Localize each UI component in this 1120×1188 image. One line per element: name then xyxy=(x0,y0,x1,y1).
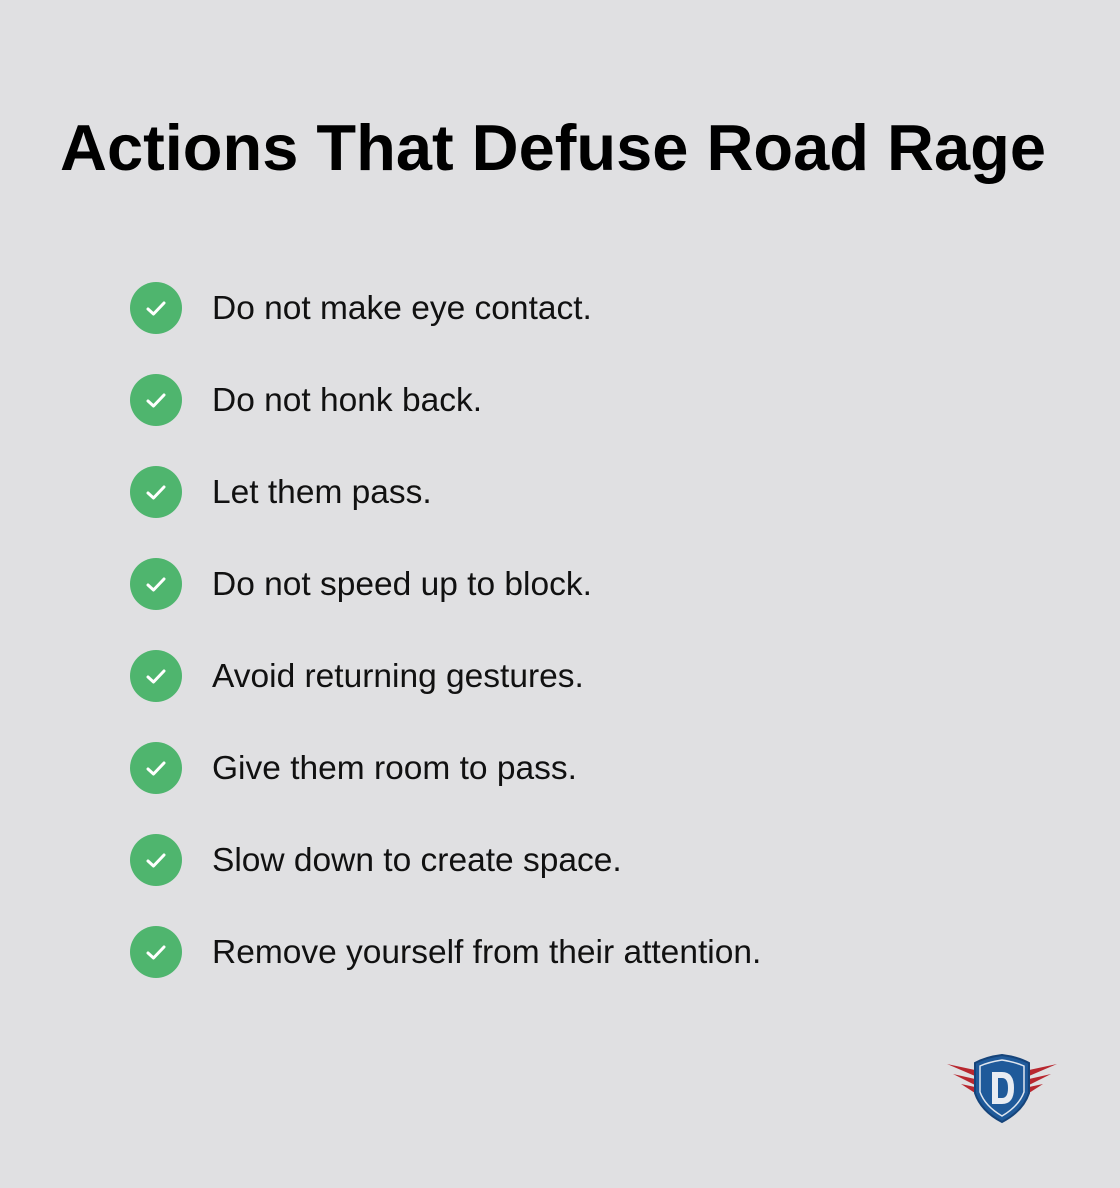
item 8: Remove yourself from their attention. xyxy=(212,934,761,971)
icon: check xyxy=(130,466,182,518)
icon: check xyxy=(130,558,182,610)
item 2 xyxy=(130,374,482,426)
item 3 xyxy=(130,466,432,518)
item 6 xyxy=(130,742,577,794)
icon: check xyxy=(130,282,182,334)
icon: check xyxy=(130,650,182,702)
icon: check xyxy=(130,834,182,886)
icon: logo shield xyxy=(947,1054,1057,1124)
item 1 xyxy=(130,282,592,334)
item 6: Give them room to pass. xyxy=(212,750,577,787)
item 7: Slow down to create space. xyxy=(212,842,622,879)
item 7 xyxy=(130,834,622,886)
icon: check xyxy=(130,742,182,794)
icon: check xyxy=(130,926,182,978)
item 5 xyxy=(130,650,584,702)
icon: check xyxy=(130,374,182,426)
title: Actions That Defuse Road Rage xyxy=(60,111,1046,184)
item 3: Let them pass. xyxy=(212,474,432,511)
item 1: Do not make eye contact. xyxy=(212,290,592,327)
item 4: Do not speed up to block. xyxy=(212,566,592,603)
item 5: Avoid returning gestures. xyxy=(212,658,584,695)
item 2: Do not honk back. xyxy=(212,382,482,419)
item 4 xyxy=(130,558,592,610)
item 8 xyxy=(130,926,761,978)
